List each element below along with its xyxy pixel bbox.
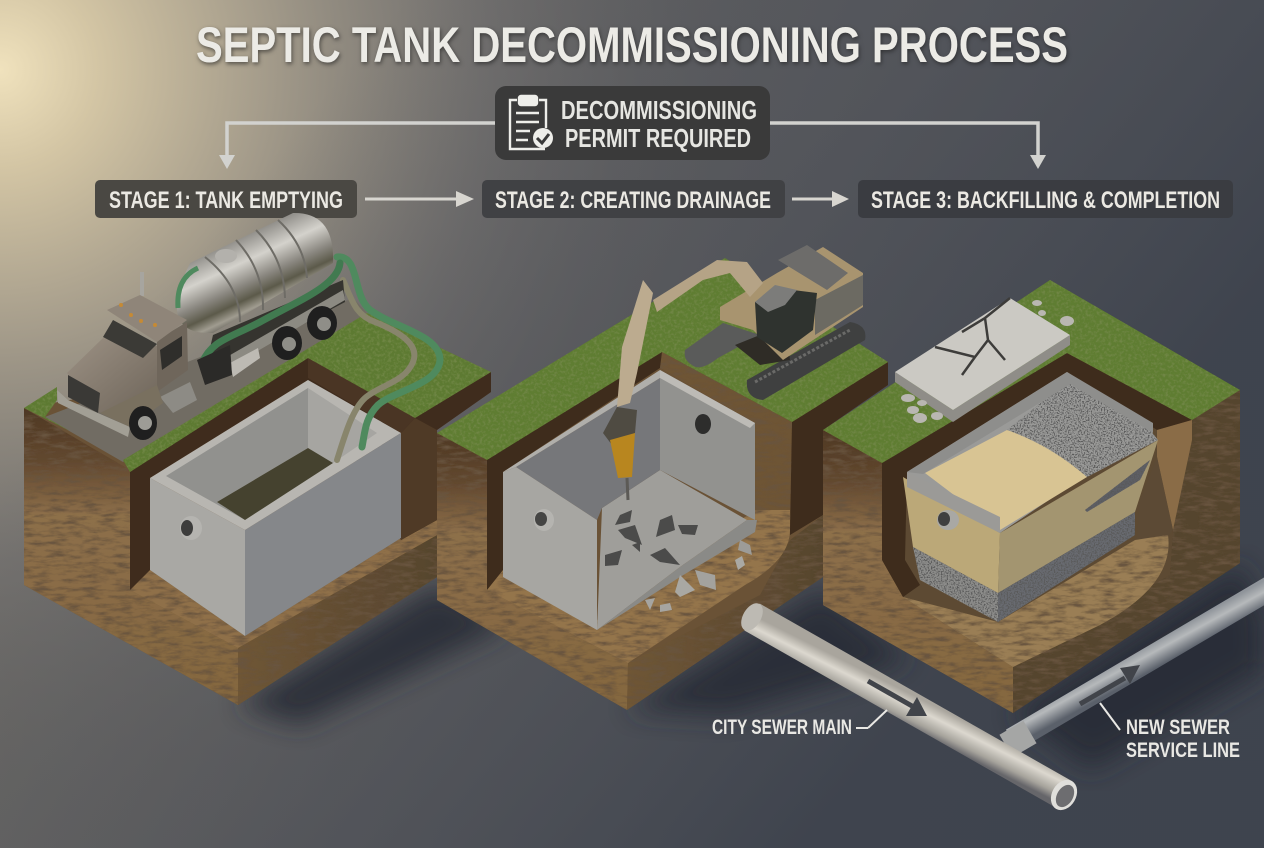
pipe stub bbox=[937, 510, 959, 530]
grass bbox=[437, 258, 888, 460]
pipe openings bbox=[534, 509, 554, 531]
arrow: permit to stage 1 bbox=[219, 123, 496, 169]
arrow: stage 1 to stage 2 bbox=[365, 191, 474, 207]
label: new sewer service line: NEW SEWER bbox=[1126, 716, 1230, 739]
exhaust bbox=[140, 272, 144, 296]
grass bbox=[823, 280, 1240, 463]
rubble bbox=[605, 510, 752, 612]
permit text bbox=[561, 95, 757, 153]
front track bbox=[747, 322, 865, 400]
stage 1 label bbox=[95, 180, 357, 218]
left face sand bbox=[903, 477, 1000, 593]
concrete tank bbox=[150, 380, 401, 636]
right face gravel bbox=[998, 512, 1135, 622]
panel: stage 3 ground block bbox=[823, 280, 1240, 713]
left face gravel bbox=[913, 547, 998, 622]
front fender bbox=[100, 385, 163, 427]
stage 3 label bbox=[858, 180, 1233, 218]
label: city sewer main: CITY SEWER MAIN bbox=[712, 716, 852, 739]
cab side bbox=[157, 322, 188, 392]
title: SEPTIC TANK DECOMMISSIONING PROCESS bbox=[196, 17, 1068, 73]
flow arrow bbox=[1080, 665, 1140, 704]
gravel surface bbox=[1007, 382, 1158, 477]
soil faces bbox=[437, 352, 888, 710]
stones bbox=[901, 300, 1074, 423]
flow arrow bbox=[868, 681, 927, 716]
undercarriage bbox=[735, 325, 790, 365]
cab bbox=[755, 290, 817, 353]
side hose bbox=[202, 263, 340, 363]
roof lights bbox=[119, 303, 157, 327]
cab roof bbox=[107, 295, 187, 342]
windshield bbox=[103, 320, 157, 358]
engine cover bbox=[778, 245, 848, 290]
permit badge bbox=[495, 86, 770, 160]
pipe stub bbox=[180, 516, 202, 540]
rear wheels bbox=[272, 306, 337, 360]
hydraulic breaker bbox=[610, 433, 635, 478]
right face sand bbox=[998, 440, 1158, 593]
cracked concrete slab bbox=[895, 298, 1070, 422]
soil faces bbox=[24, 358, 491, 705]
stage 2 label: STAGE 2: CREATING DRAINAGE bbox=[495, 187, 771, 214]
chassis bbox=[205, 280, 345, 370]
arrow: stage 2 to stage 3 bbox=[792, 191, 849, 207]
fuel tank bbox=[230, 348, 260, 377]
arm bbox=[617, 280, 653, 407]
bumper bbox=[57, 390, 130, 437]
backfilled tank cross-section bbox=[903, 372, 1158, 622]
city sewer main pipe bbox=[737, 600, 1082, 815]
breaker mount bbox=[603, 407, 637, 445]
broken tank bbox=[503, 370, 757, 630]
hoses bbox=[337, 257, 440, 460]
sludge water bbox=[217, 448, 333, 520]
grass bbox=[24, 313, 491, 472]
road bbox=[45, 298, 367, 462]
panel: stage 1 ground block bbox=[24, 213, 491, 705]
permit text: DECOMMISSIONING bbox=[561, 95, 757, 125]
cast shadows under blocks bbox=[238, 565, 1264, 770]
upper body bbox=[720, 247, 863, 360]
concrete rim bbox=[907, 372, 1153, 533]
boom bbox=[653, 260, 763, 312]
arrow: permit to stage 3 bbox=[769, 123, 1046, 169]
permit text: PERMIT REQUIRED bbox=[565, 123, 751, 153]
stage 1 label: STAGE 1: TANK EMPTYING bbox=[109, 187, 343, 214]
inset gravel band bbox=[1085, 460, 1150, 512]
label: new sewer service line bbox=[1100, 703, 1240, 762]
vacuum truck bbox=[57, 213, 345, 440]
icon: clipboard with check bbox=[510, 96, 553, 149]
tanker barrel bbox=[177, 213, 333, 333]
excavator bbox=[603, 245, 865, 500]
soil faces bbox=[823, 353, 1240, 713]
stage 2 label bbox=[482, 180, 785, 218]
grille bbox=[68, 375, 100, 413]
new sewer service line pipe bbox=[1006, 585, 1264, 746]
front wheel bbox=[129, 406, 157, 440]
side panel bbox=[815, 275, 863, 335]
hood bbox=[67, 338, 157, 413]
panel: stage 2 ground block bbox=[437, 245, 888, 710]
sand surface bbox=[925, 430, 1087, 530]
rear track bbox=[685, 323, 760, 367]
tank top base bbox=[907, 372, 1153, 533]
